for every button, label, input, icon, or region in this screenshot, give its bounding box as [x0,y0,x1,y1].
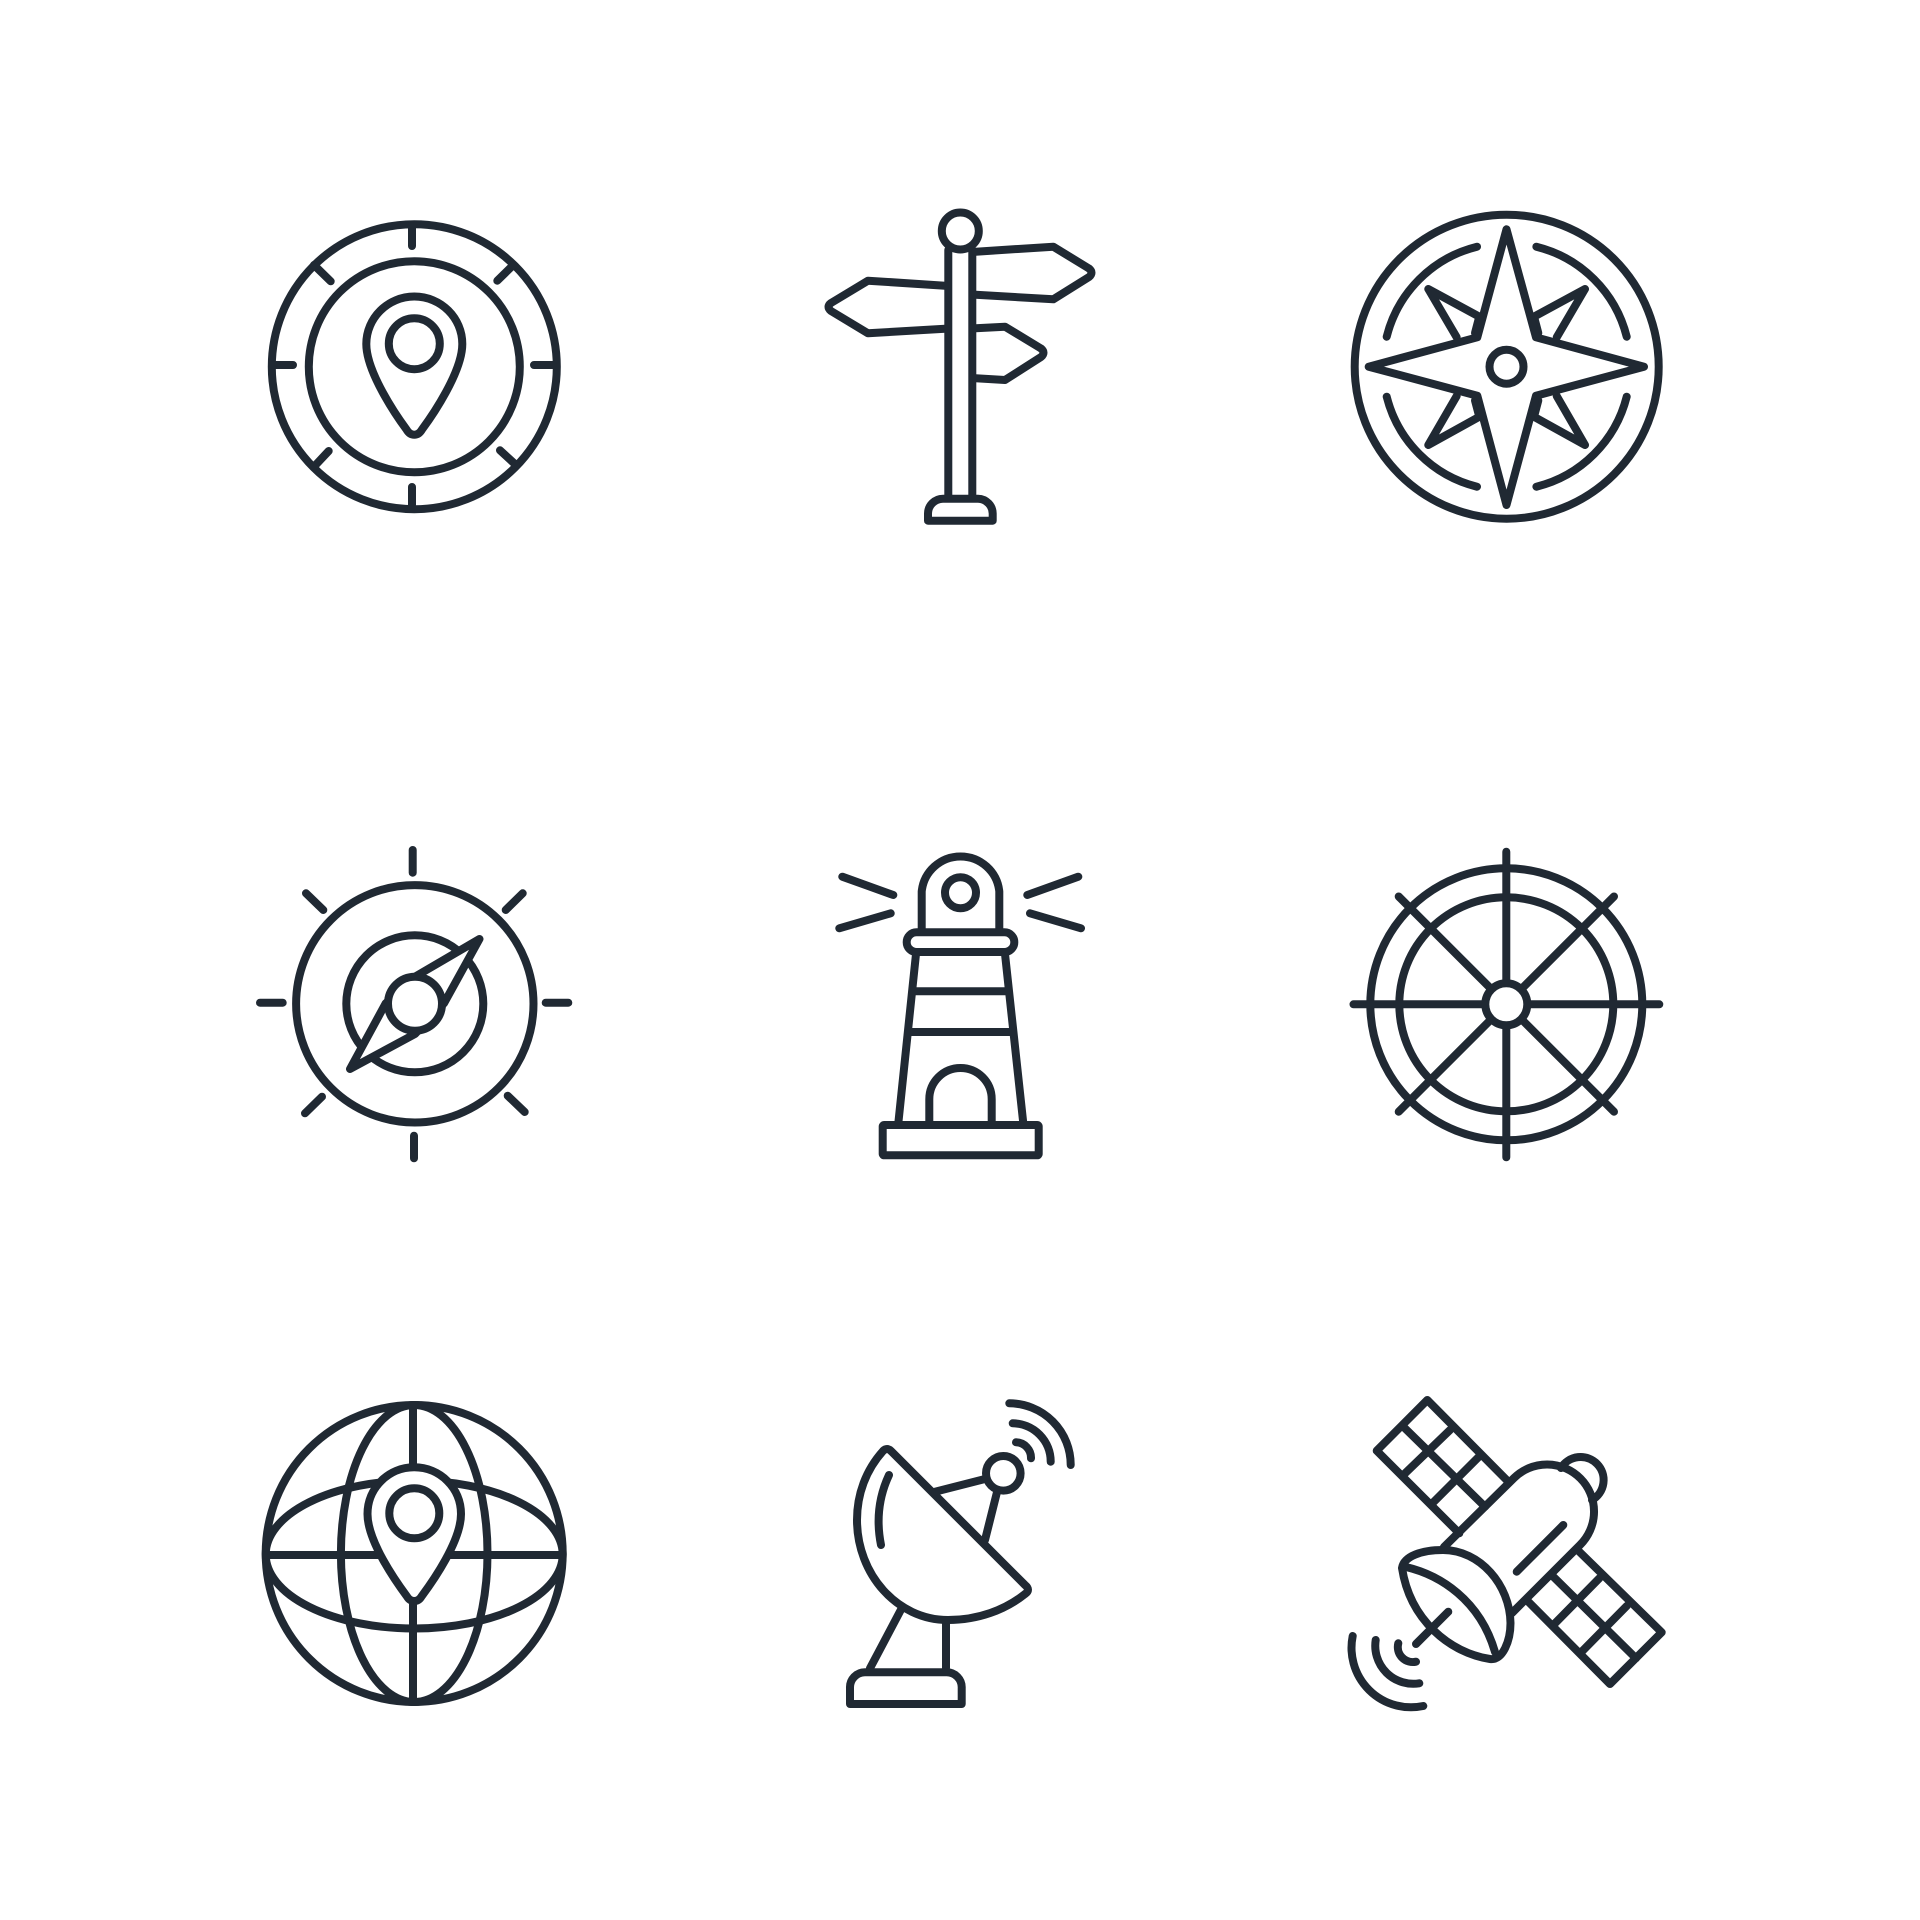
icon: location pin in dial [272,224,557,509]
dish bowl [857,1449,1028,1620]
satellite dish [1402,1550,1510,1659]
sign: lower right arrow [976,327,1044,380]
location pin [366,296,462,435]
globe location pin [368,1467,461,1601]
icon: signpost [828,212,1092,521]
sign: left arrow [828,281,945,333]
satellite signal waves [1352,1636,1423,1707]
dish base [850,1672,962,1704]
sign: upper right arrow [976,247,1092,299]
light rays [839,877,1081,928]
four-point star [1369,229,1644,505]
icon: satellite dish [850,1403,1071,1704]
icon: ship wheel [1354,852,1659,1157]
icon: satellite [1352,1400,1662,1707]
lower solar panel [1528,1552,1662,1684]
icon: lighthouse [839,856,1081,1155]
upper solar panel [1377,1400,1508,1533]
compass needle [350,939,480,1069]
icon: compass rose [1355,215,1659,519]
icon: globe with pin [266,1405,563,1702]
signal waves [1009,1403,1071,1465]
satellite body [1444,1464,1594,1613]
icon: compass with needle [260,850,568,1158]
signpost base [928,499,993,521]
